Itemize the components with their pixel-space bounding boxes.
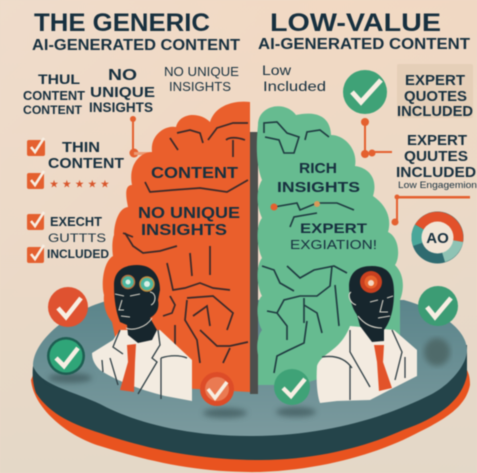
checkbox icons [27,138,45,263]
text block: thul content: THUL [38,71,80,87]
connector: engagement bar [392,194,470,226]
text block: no unique insights: UNIQUE [90,84,155,101]
text block: no unique insights top [164,64,239,94]
title: left: AI-GENERATED CONTENT [32,37,240,54]
brain: right green [257,106,403,385]
icon: red check badge [200,372,234,406]
text block: low included: Low [262,62,292,78]
icon: green check top [343,70,387,114]
text block: execht quotes included: EXECHT [50,214,102,229]
text block: thin content: CONTENT [48,155,124,172]
callout box: expert quotes [397,64,473,120]
text block: execht quotes included: INCLUDED [47,247,109,261]
text block: expert quutes included: QUUTES [404,148,468,165]
icon: AO badge: AO [426,230,449,247]
text block: execht quotes included [47,214,109,261]
icon: green check right [418,286,458,326]
text block: no unique insights: NO [108,67,137,84]
figure: right man [317,266,417,403]
brain labels: left: NO UNIQUE [138,205,240,222]
callout box: expert quotes: EXPERT [405,72,465,89]
text block: expert quutes included: EXPERT [407,132,467,149]
title: right: LOW-VALUE [270,9,441,37]
text block: expert quutes included [396,132,476,181]
text block: no unique insights [89,67,155,115]
platform [31,300,470,472]
text block: no unique insights top: INSIGHTS [169,79,231,94]
text block: low included: Included [263,78,326,94]
text block: thul content: CONTENT [23,88,85,103]
connector: center right [361,118,392,158]
text block: thul content [23,71,85,117]
brain labels: right: EXPERT [300,220,368,236]
title: left [32,9,240,54]
text block: execht quotes included: GUTTTS [48,231,106,245]
text block: thin content [48,139,124,172]
brain labels: left: CONTENT [151,165,238,182]
low engagement label: Low Engagemion [398,180,477,190]
title: left: THE GENERIC [34,9,210,37]
title: right [258,9,470,53]
icon: AO badge [412,212,464,264]
callout box: expert quotes: INCLUDED [397,103,473,120]
icon: green check left [47,337,85,375]
text block: expert quutes included: INCLUDED [396,164,476,181]
icon: red check left [48,287,88,327]
icon: green check bottom [274,369,310,405]
brain labels: left: INSIGHTS [141,222,227,239]
divider gap [250,132,258,394]
brain labels: left [138,165,240,239]
text block: no unique insights: INSIGHTS [89,99,153,115]
text block: no unique insights top: NO UNIQUE [164,64,239,79]
connector: left [130,116,152,158]
star rating: ★ ★ ★ ★ ★ [50,179,110,189]
text block: thul content: CONTENT [23,103,83,117]
figure: left man [92,265,192,401]
brain labels: right: INSIGHTS [277,179,360,196]
title: right: AI-GENERATED CONTENT [258,36,470,53]
brain: left red [103,102,250,392]
callout box: expert quotes: QUOTES [404,88,467,105]
brain labels: right: EXGIATION! [290,237,377,252]
brain labels: right [277,160,377,252]
text block: low included [262,62,326,94]
brain labels: right: RICH [299,160,337,177]
text block: thin content: THIN [62,139,100,156]
shadows [48,373,316,418]
